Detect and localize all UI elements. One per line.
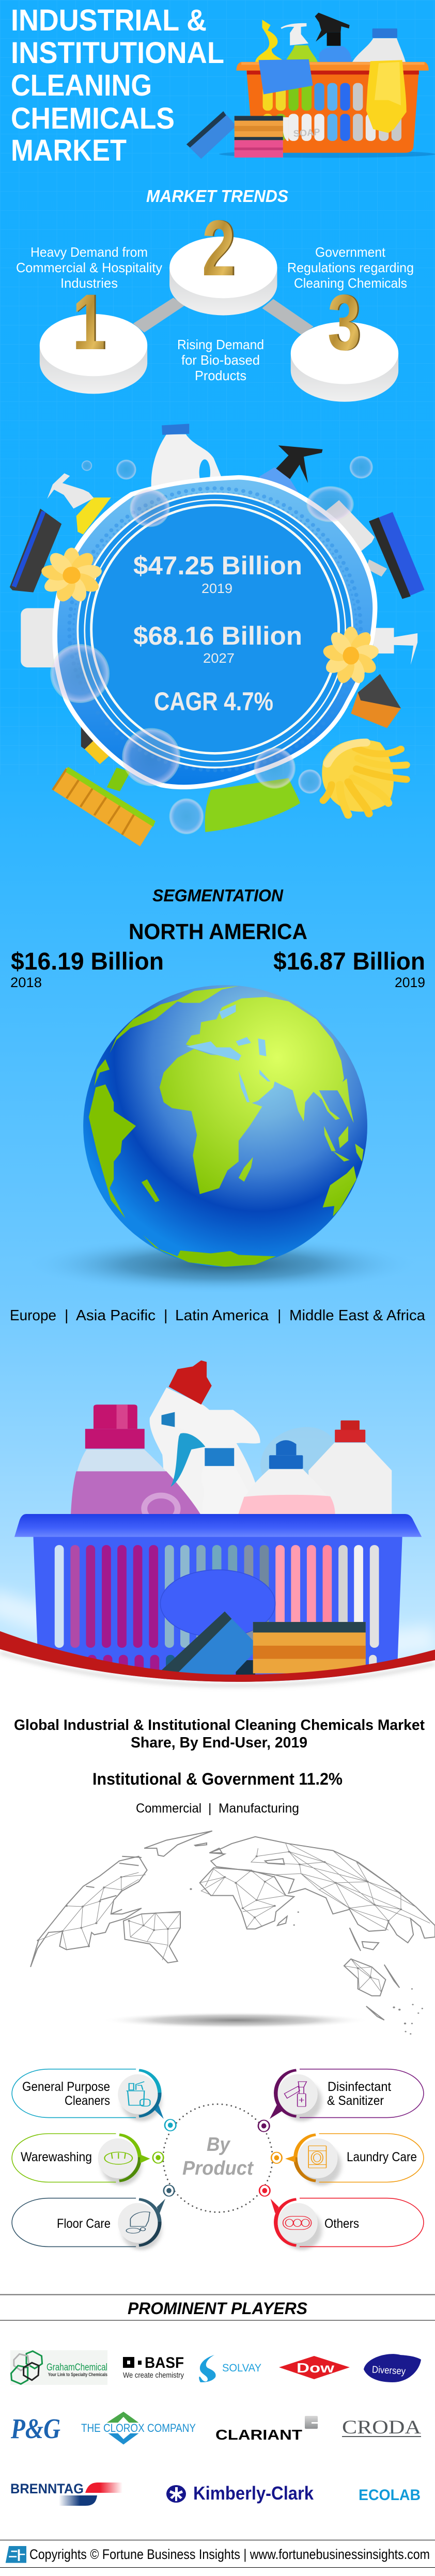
stat: 2027 market size: 2027 (203, 650, 235, 666)
panel: market size circle with cleaning items (10, 424, 425, 846)
panel: by product segments (12, 2069, 424, 2250)
pill: general purpose cleaners (12, 2069, 164, 2121)
text: trend 1: Industries (60, 275, 118, 291)
labels: by product segments: Warewashing (21, 2150, 92, 2164)
flower right (322, 627, 380, 685)
stat: north america 2019: 2019 (395, 975, 425, 990)
heading: prominent players: PROMINENT PLAYERS (128, 2299, 308, 2318)
number 2: 2 (204, 204, 237, 292)
icon: soap right (326, 500, 375, 552)
text: other regions: | (65, 1307, 69, 1324)
logo: croda: CRODA (342, 2417, 421, 2438)
labels: by product segments: Floor Care (57, 2216, 111, 2231)
soap label: SOAP (293, 127, 320, 139)
heading: segmentation: SEGMENTATION (152, 886, 284, 905)
labels: by product segments: & Sanitizer (327, 2094, 384, 2108)
heading: market trends: MARKET TRENDS (146, 186, 288, 206)
haze above the swoosh (0, 1601, 435, 1649)
labels: by product segments: Laundry Care (347, 2150, 417, 2164)
text: trend 2 (177, 337, 264, 383)
text: commercial and manufacturing (136, 1801, 299, 1816)
title: CHEMICALS (11, 102, 175, 135)
icon: squeegee left (10, 509, 61, 592)
heading: end-user share (14, 1717, 425, 1751)
text: trend 1: Commercial & Hospitality (16, 260, 162, 275)
number 1: 1 (74, 278, 107, 366)
logo: basf: BASF (145, 2354, 184, 2371)
globe illustration (28, 985, 416, 1293)
logo: graham chemical (10, 2350, 107, 2385)
title: CLEANING (11, 69, 152, 102)
flower left (40, 548, 103, 604)
bottle: blue cap with pink liquid (238, 1440, 335, 1516)
logo: solvay: SOLVAY (222, 2362, 261, 2374)
basket slots (55, 1545, 379, 1684)
icon: sponge left (81, 719, 112, 764)
swoosh: red band and white lower page (0, 1631, 435, 1713)
bottle: white with red cap behind (150, 1361, 261, 1516)
stat: 2019 market size (133, 551, 302, 596)
stat: 2019 market size: $47.25 Billion (133, 551, 302, 580)
dome (260, 1427, 336, 1476)
text: commercial and manufacturing: Commercial (136, 1801, 201, 1816)
text: other regions: | (164, 1307, 168, 1324)
footer: company logo (6, 2546, 26, 2563)
heading: end-user share: Share, By End-User, 2019 (131, 1735, 307, 1751)
logo: graham chemical: GrahamChemical (46, 2362, 107, 2373)
labels: by product segments: General Purpose (22, 2080, 110, 2094)
logo: clorox (81, 2412, 196, 2444)
text: trend 3: Government (315, 244, 386, 260)
logo: p&g: P&G (10, 2413, 60, 2444)
white page fill (0, 1705, 435, 2576)
text: trend 2: for Bio-based (181, 352, 260, 368)
illustration: blue basket with bottles (14, 1361, 422, 1687)
pill: floor care (12, 2198, 165, 2250)
logo: kimberly-clark: Kimberly-Clark (193, 2483, 314, 2504)
number 2: 2 (202, 204, 235, 292)
pill: warewashing (12, 2134, 150, 2185)
text: other regions: Asia Pacific (76, 1307, 156, 1324)
title: MARKET (11, 134, 127, 167)
pill: others (271, 2198, 424, 2250)
logo: dow (279, 2356, 350, 2379)
heading: by product: Product (182, 2158, 254, 2179)
icon: squeegee right (366, 512, 425, 599)
podium 2 (169, 237, 277, 315)
number 1: 1 (72, 278, 105, 366)
labels: by product segments: Others (324, 2216, 359, 2231)
logo: ecolab: ECOLAB (359, 2487, 421, 2504)
stat: 2027 market size (133, 621, 302, 666)
logo: brenntag (10, 2481, 122, 2506)
dotted ring (163, 2104, 272, 2212)
text: other regions (10, 1307, 426, 1324)
logo: clariant: CLARIANT (215, 2427, 302, 2443)
ring nodes (153, 2119, 282, 2196)
text: trend 1: Heavy Demand from (30, 244, 148, 260)
stat: north america 2018 (10, 947, 164, 990)
pill: disinfectant and sanitizer (270, 2069, 424, 2121)
stat: 2019 market size: 2019 (201, 581, 232, 596)
text: trend 3: Cleaning Chemicals (294, 275, 407, 291)
stat: north america 2019 (273, 947, 425, 990)
text: other regions: | (277, 1307, 282, 1324)
circle frame (52, 475, 377, 789)
oval label (160, 1570, 275, 1637)
logo: brenntag: BRENNTAG (10, 2481, 84, 2496)
stat: cagr: CAGR 4.7% (154, 687, 273, 716)
bottle: pink liquid with magenta cap (71, 1404, 201, 1522)
heading: end-user share: Global Industrial & Institutional Cleaning Chemicals Market (14, 1717, 425, 1734)
heading: north america: NORTH AMERICA (129, 919, 307, 944)
bottle: white with small red cap (308, 1420, 392, 1516)
icon: orange basket with cleaning supplies (187, 12, 435, 159)
podium 1 (40, 314, 147, 394)
stat: north america 2019: $16.87 Billion (273, 947, 425, 975)
logo: diversey: Diversey (372, 2364, 406, 2377)
stat: 2027 market size: $68.16 Billion (133, 621, 302, 650)
continents (89, 986, 363, 1267)
pill: laundry care (285, 2134, 424, 2185)
stat: institutional and government: Institutional & Government 11.2% (92, 1770, 343, 1788)
number 3: 3 (328, 278, 361, 367)
text: other regions: Europe (10, 1307, 56, 1324)
text: trend 2: Products (195, 368, 246, 383)
text: trend 3 (287, 244, 414, 291)
logo: diversey (364, 2354, 421, 2382)
text: trend 1 (16, 244, 162, 291)
illustration: wireframe world map (30, 1831, 435, 2035)
logo: solvay (199, 2355, 261, 2382)
seas (187, 1004, 271, 1102)
text: other regions: Middle East & Africa (289, 1307, 426, 1324)
icon: brush (53, 767, 156, 846)
text: commercial and manufacturing: | (208, 1801, 212, 1816)
heading: by product: By (207, 2134, 231, 2156)
labels: by product segments: Cleaners (65, 2094, 110, 2108)
title: INSTITUTIONAL (11, 36, 224, 70)
soap bubbles (50, 456, 373, 834)
sponges (160, 1612, 366, 1687)
logo: dow: Dow (297, 2360, 335, 2376)
icon: pump bottle left (47, 473, 111, 535)
logo: basf: We create chemistry (123, 2371, 184, 2380)
labels: by product segments (21, 2080, 417, 2231)
heading: by product (182, 2134, 254, 2179)
title (11, 4, 224, 167)
diagram: numbered podiums (40, 204, 398, 402)
labels: by product segments: Disinfectant (328, 2080, 391, 2094)
logo: basf (123, 2354, 184, 2380)
icon: sponge right (351, 674, 401, 728)
text: trend 2: Rising Demand (177, 337, 264, 352)
logo: graham chemical: Your Link to Specialty Chemicals (48, 2372, 107, 2377)
number 3: 3 (329, 278, 362, 367)
logo: clariant (215, 2416, 318, 2443)
text: commercial and manufacturing: Manufacturing (219, 1801, 299, 1816)
icon: spray bottle (259, 445, 323, 492)
map shadow (101, 2012, 370, 2028)
page background (0, 0, 435, 1705)
stat: north america 2018: 2018 (10, 975, 42, 990)
stat: north america 2018: $16.19 Billion (11, 947, 164, 975)
icon: dustpan (205, 778, 300, 832)
title: INDUSTRIAL & (11, 4, 207, 37)
connector bars (133, 298, 314, 335)
basket rim (14, 1514, 422, 1537)
logo: clorox: THE CLOROX COMPANY (81, 2422, 196, 2434)
basket body (33, 1536, 402, 1684)
icon: pump right (373, 628, 417, 665)
text: trend 3: Regulations regarding (287, 260, 414, 275)
icon: mop (322, 740, 407, 815)
text: other regions: Latin America (175, 1307, 269, 1324)
podium 3 (291, 322, 398, 402)
icon: bleach bottle (151, 424, 221, 490)
spray bottle (162, 1410, 261, 1516)
icon: soap left (21, 608, 59, 667)
